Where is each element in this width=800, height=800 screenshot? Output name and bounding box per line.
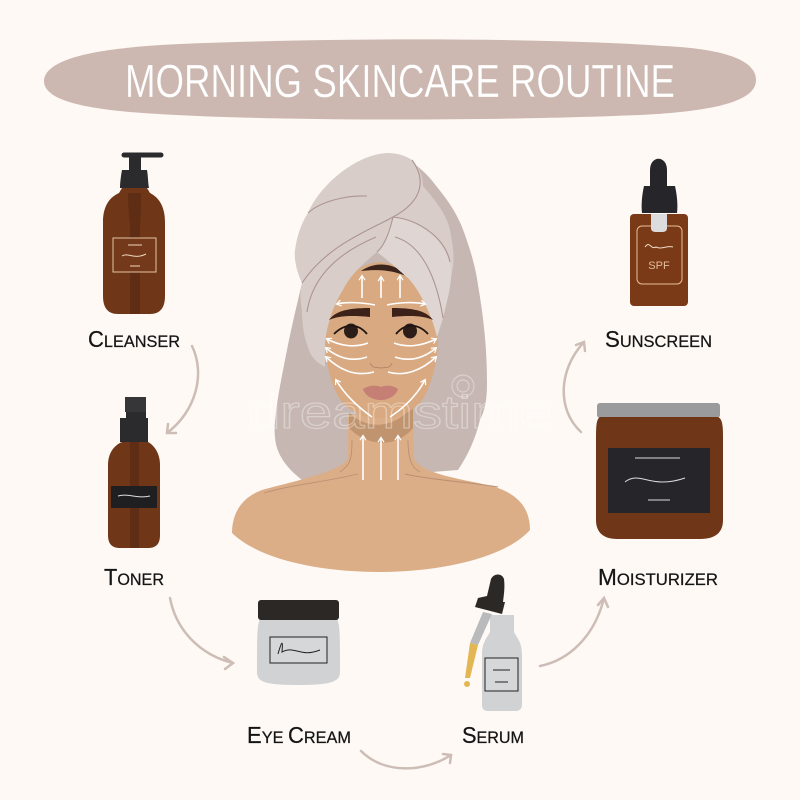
- neck and collarbone lines: [264, 440, 498, 493]
- cleanser bottle: [103, 155, 165, 314]
- title banner: [44, 39, 756, 120]
- brows and eyes: [329, 308, 433, 338]
- nose and lips: [363, 363, 398, 400]
- moisturizer jar: [596, 403, 723, 539]
- watermark: dreamstime: [248, 386, 552, 438]
- face: [325, 262, 438, 418]
- label: eye cream: EYE CREAM: [247, 722, 351, 748]
- towel folds: [302, 160, 450, 318]
- arrow: cleanser to toner: [167, 346, 198, 433]
- sunscreen bottle: SPF: [648, 260, 670, 272]
- label: toner: TONER: [104, 564, 164, 590]
- towel: [295, 153, 454, 367]
- chin shadow: [349, 405, 413, 443]
- title text: MORNING SKINCARE ROUTINE: [125, 55, 675, 107]
- sunscreen bottle: [630, 159, 688, 306]
- toner bottle: [108, 397, 160, 548]
- woman illustration: [232, 153, 530, 572]
- massage arrows: [326, 276, 436, 480]
- arrow: moisturizer to sunscreen: [564, 342, 585, 432]
- neck and shoulders: [232, 410, 530, 572]
- hair: [275, 153, 487, 482]
- watermark: [248, 375, 552, 438]
- label: sunscreen: SUNSCREEN: [605, 326, 712, 352]
- label: moisturizer: MOISTURIZER: [598, 564, 718, 590]
- label: serum: SERUM: [462, 722, 524, 748]
- serum bottle: [464, 574, 522, 711]
- eye cream jar: [257, 600, 340, 685]
- label: cleanser: CLEANSER: [88, 326, 180, 352]
- hairline: [361, 264, 409, 277]
- arrows between steps: [167, 342, 608, 768]
- arrow: serum to moisturizer: [540, 598, 608, 666]
- arrow: eye cream to serum: [361, 751, 451, 768]
- arrow: toner to eye cream: [170, 598, 233, 669]
